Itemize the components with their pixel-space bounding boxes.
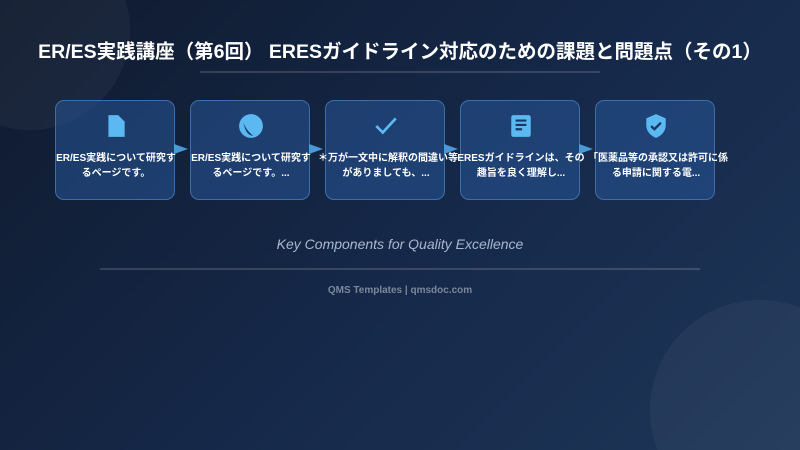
text: step 1: るページです。 [82, 168, 150, 179]
panel: step 5 [595, 100, 715, 200]
panel: step 4 [460, 100, 580, 200]
text: step 4: 趣旨を良く理解し... [477, 168, 565, 179]
icon: shield check [646, 114, 666, 138]
text: step 3: ＊万が一文中に解釈の間違い等 [318, 153, 458, 164]
arrow 1 [174, 144, 188, 154]
text: step 5: る申請に関する電... [612, 168, 700, 179]
panel: step 3 [325, 100, 445, 200]
text: step 5 [588, 152, 728, 179]
panel: step 1 [55, 100, 175, 200]
text: step 3 [318, 152, 458, 179]
text: step 5: 「医薬品等の承認又は許可に係 [588, 153, 728, 164]
icon: leaf circle [239, 114, 263, 138]
arrow 4 [579, 144, 593, 154]
text: step 1 [56, 152, 176, 179]
text: step 4 [457, 152, 585, 179]
panel: step 2 [190, 100, 310, 200]
arrow 2 [309, 144, 323, 154]
icon: check [375, 118, 397, 134]
text: step 3: がありましても、... [342, 168, 430, 179]
text: step 2: ER/ES実践について研究す [191, 153, 311, 164]
text: step 1: ER/ES実践について研究す [56, 153, 176, 164]
text: step 2: るページです。... [212, 168, 290, 179]
subtitle: Key Components for Quality Excellence [277, 236, 523, 252]
icon: file [108, 115, 125, 137]
text: step 2 [191, 152, 311, 179]
title: ER/ES実践講座（第6回） ERESガイドライン対応のための課題と問題点（その1） [38, 41, 762, 63]
text: step 4: ERESガイドラインは、その [457, 153, 585, 164]
icon: document [511, 115, 531, 137]
footer: QMS Templates | qmsdoc.com [328, 285, 472, 296]
arrow 3 [444, 144, 458, 154]
